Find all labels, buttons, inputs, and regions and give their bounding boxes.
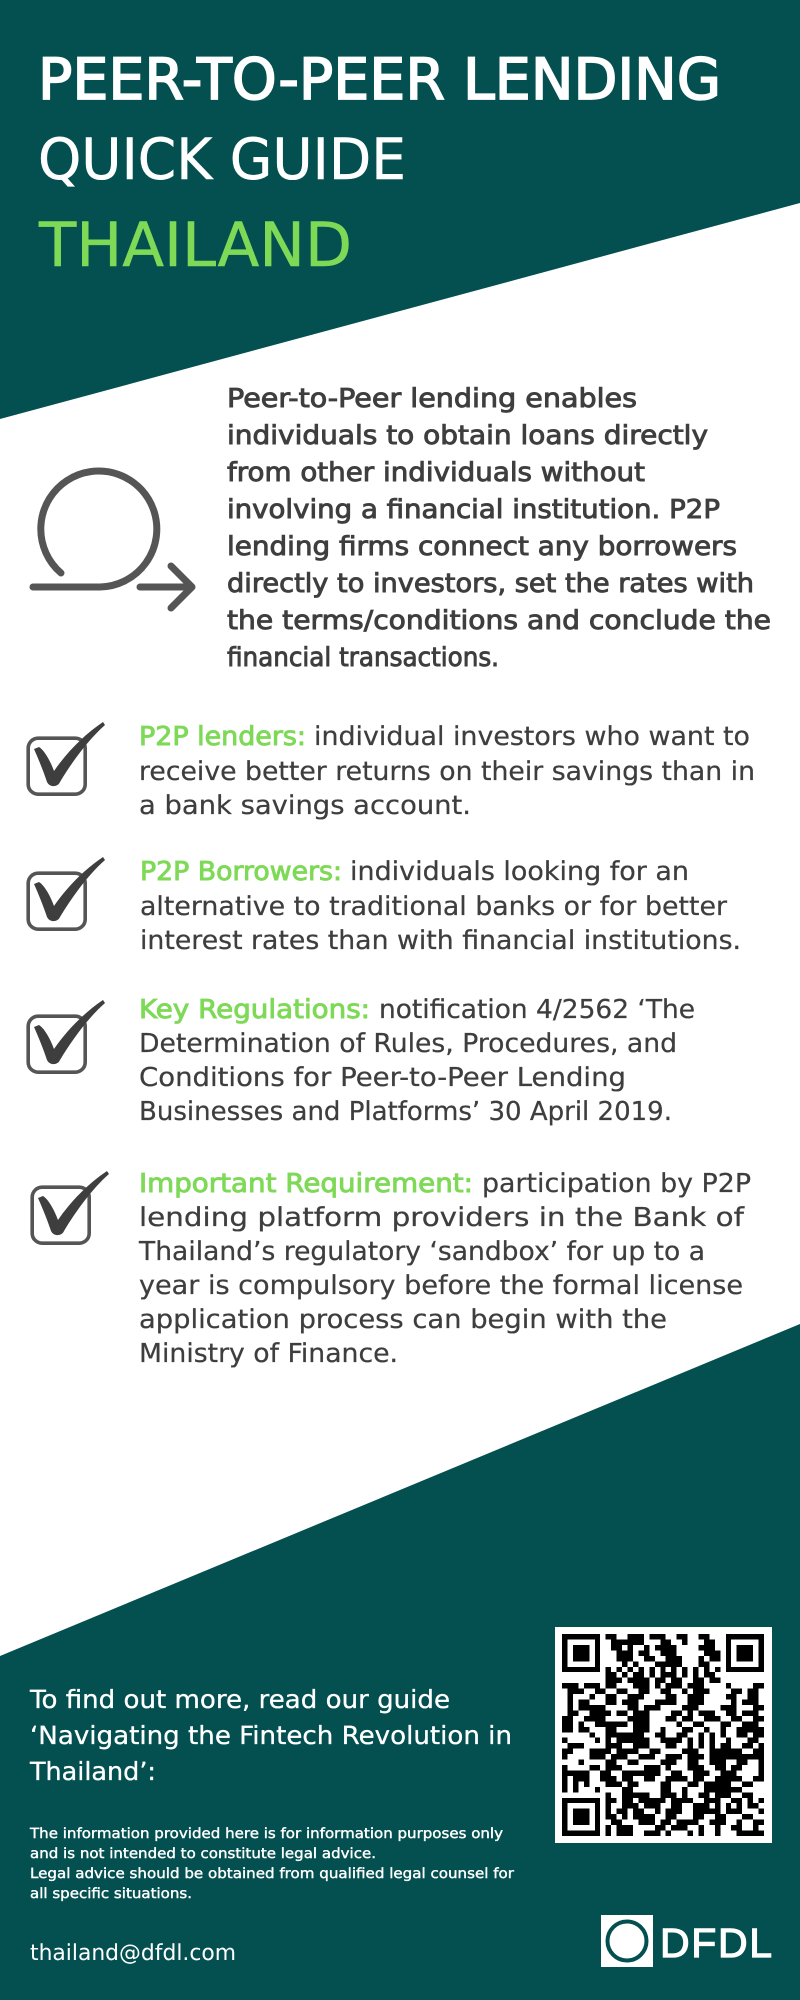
item: important requirement: lending platform providers in the Bank of — [139, 1203, 745, 1233]
item: P2P lenders: P2P lenders: — [139, 722, 306, 752]
item: key regulations — [139, 995, 695, 1127]
bottom banner background — [0, 1324, 800, 2000]
intro paragraph: Peer-to-Peer lending enables — [227, 384, 637, 414]
intro paragraph: the terms/conditions and conclude the — [227, 606, 771, 636]
disclaimer: The information provided here is for information purposes only — [29, 1826, 503, 1842]
icon: checkbox key regulations — [28, 1000, 105, 1072]
item: key regulations: Key Regulations: — [139, 995, 370, 1025]
item: key regulations: Conditions for Peer-to-Peer Lending — [139, 1063, 626, 1093]
icon: checkbox important requirement — [32, 1171, 109, 1243]
disclaimer: all specific situations. — [30, 1886, 192, 1902]
intro paragraph: involving a financial institution. P2P — [227, 495, 720, 525]
item: P2P borrowers: individuals looking for an — [350, 857, 689, 887]
call to action: Thailand’: — [29, 1757, 156, 1786]
title: PEER-TO-PEER LENDING — [38, 47, 721, 113]
disclaimer: and is not intended to constitute legal advice. — [30, 1846, 376, 1862]
call to action: ‘Navigating the Fintech Revolution in — [30, 1721, 512, 1750]
item: P2P lenders: individual investors who want to — [314, 722, 750, 752]
item: P2P lenders: a bank savings account. — [139, 791, 471, 821]
item: key regulations: notification 4/2562 ‘The — [379, 995, 695, 1025]
intro paragraph: financial transactions. — [227, 643, 499, 673]
item: important requirement: application process can begin with the — [139, 1305, 667, 1335]
icon: loop arrow — [33, 471, 192, 608]
call to action — [29, 1685, 512, 1786]
item: P2P borrowers: interest rates than with financial institutions. — [140, 926, 741, 956]
call to action: To find out more, read our guide — [29, 1685, 450, 1714]
DFDL logo: DFDL — [660, 1920, 772, 1966]
item: key regulations: Determination of Rules, Procedures, and — [139, 1029, 677, 1059]
intro paragraph: directly to investors, set the rates with — [227, 569, 754, 599]
icon: checkbox P2P borrowers — [28, 857, 105, 929]
title — [38, 47, 721, 281]
title: QUICK GUIDE — [38, 127, 406, 193]
item: important requirement — [138, 1169, 751, 1369]
disclaimer — [29, 1826, 514, 1902]
item: P2P borrowers: alternative to traditional banks or for better — [140, 892, 727, 922]
title: THAILAND — [38, 210, 352, 281]
item: key regulations: Businesses and Platforms’ 30 April 2019. — [139, 1097, 672, 1127]
intro paragraph: from other individuals without — [227, 458, 645, 488]
top banner background — [0, 0, 800, 419]
QR code — [555, 1627, 772, 1843]
item: P2P lenders — [139, 722, 755, 821]
item: important requirement: Ministry of Finance. — [139, 1339, 398, 1369]
item: important requirement: Thailand’s regulatory ‘sandbox’ for up to a — [138, 1237, 705, 1267]
item: P2P borrowers: P2P Borrowers: — [140, 857, 342, 887]
item: P2P borrowers — [140, 857, 741, 956]
intro paragraph: lending firms connect any borrowers — [227, 532, 737, 562]
intro paragraph: individuals to obtain loans directly — [227, 421, 708, 451]
item: important requirement: participation by P2P — [482, 1169, 751, 1199]
disclaimer: Legal advice should be obtained from qualified legal counsel for — [30, 1866, 514, 1882]
item: important requirement: Important Requirement: — [139, 1169, 473, 1199]
DFDL logo — [601, 1915, 772, 1967]
intro paragraph — [227, 384, 771, 673]
item: important requirement: year is compulsory before the formal license — [139, 1271, 743, 1301]
email: thailand@dfdl.com — [30, 1941, 236, 1966]
icon: checkbox P2P lenders — [28, 722, 105, 794]
item: P2P lenders: receive better returns on their savings than in — [139, 757, 755, 787]
